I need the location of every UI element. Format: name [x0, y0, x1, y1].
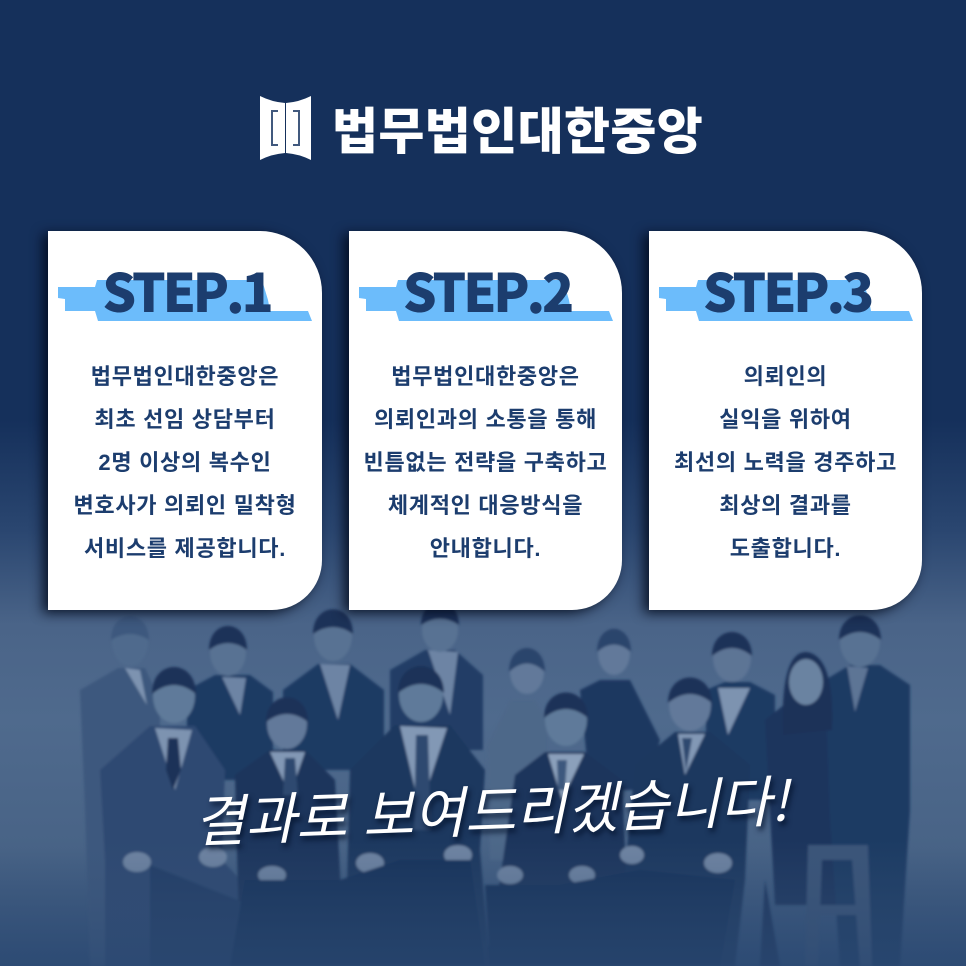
slogan: handwritten tagline: 결과로 보여드리겠습니다! [191, 756, 803, 858]
back row [80, 668, 160, 966]
front shirts and ties [155, 728, 192, 790]
highlight brush [659, 280, 913, 321]
logo icon: open door book [260, 96, 311, 160]
text: step 1 description: 변호사가 의뢰인 밀착형 [73, 493, 297, 518]
legs [150, 865, 250, 966]
stool [805, 845, 872, 966]
front heads [153, 669, 195, 723]
text: step 2 description: 체계적인 대응방식을 [388, 493, 583, 518]
heading: step 1: STEP.1 [102, 252, 271, 328]
panel: step 3 [649, 231, 922, 610]
text: step 1 description: 서비스를 제공합니다. [84, 536, 286, 561]
highlight brush [58, 280, 312, 321]
panel: step 2 [349, 231, 622, 610]
text: step 2 description: 의뢰인과의 소통을 통해 [374, 407, 597, 432]
panel: step 1 [48, 231, 322, 610]
title: firm name: 법무법인대한중앙 [332, 92, 703, 164]
text: step 3 description: 도출합니다. [730, 536, 841, 561]
text: step 1 description [73, 364, 297, 561]
text: step 1 description: 최초 선임 상담부터 [94, 407, 276, 432]
text: step 3 description: 최선의 노력을 경주하고 [674, 450, 897, 475]
text: step 1 description: 2명 이상의 복수인 [98, 450, 272, 475]
back shirts [125, 668, 147, 705]
text: step 3 description: 의뢰인의 [744, 364, 827, 389]
text: step 2 description [364, 364, 607, 561]
heading: step 2: STEP.2 [403, 252, 571, 328]
heading: step 3: STEP.3 [703, 252, 871, 328]
text: step 3 description: 실익을 위하여 [719, 407, 852, 432]
text: step 2 description: 법무법인대한중앙은 [391, 364, 580, 389]
front row [100, 726, 250, 966]
text: step 3 description [674, 364, 897, 561]
back heads [112, 618, 148, 666]
text: step 3 description: 최상의 결과를 [719, 493, 852, 518]
text: step 2 description: 빈틈없는 전략을 구축하고 [364, 450, 607, 475]
hands [123, 852, 151, 872]
highlight brush [359, 280, 613, 321]
text: step 2 description: 안내합니다. [430, 536, 541, 561]
text: step 1 description: 법무법인대한중앙은 [91, 364, 279, 389]
